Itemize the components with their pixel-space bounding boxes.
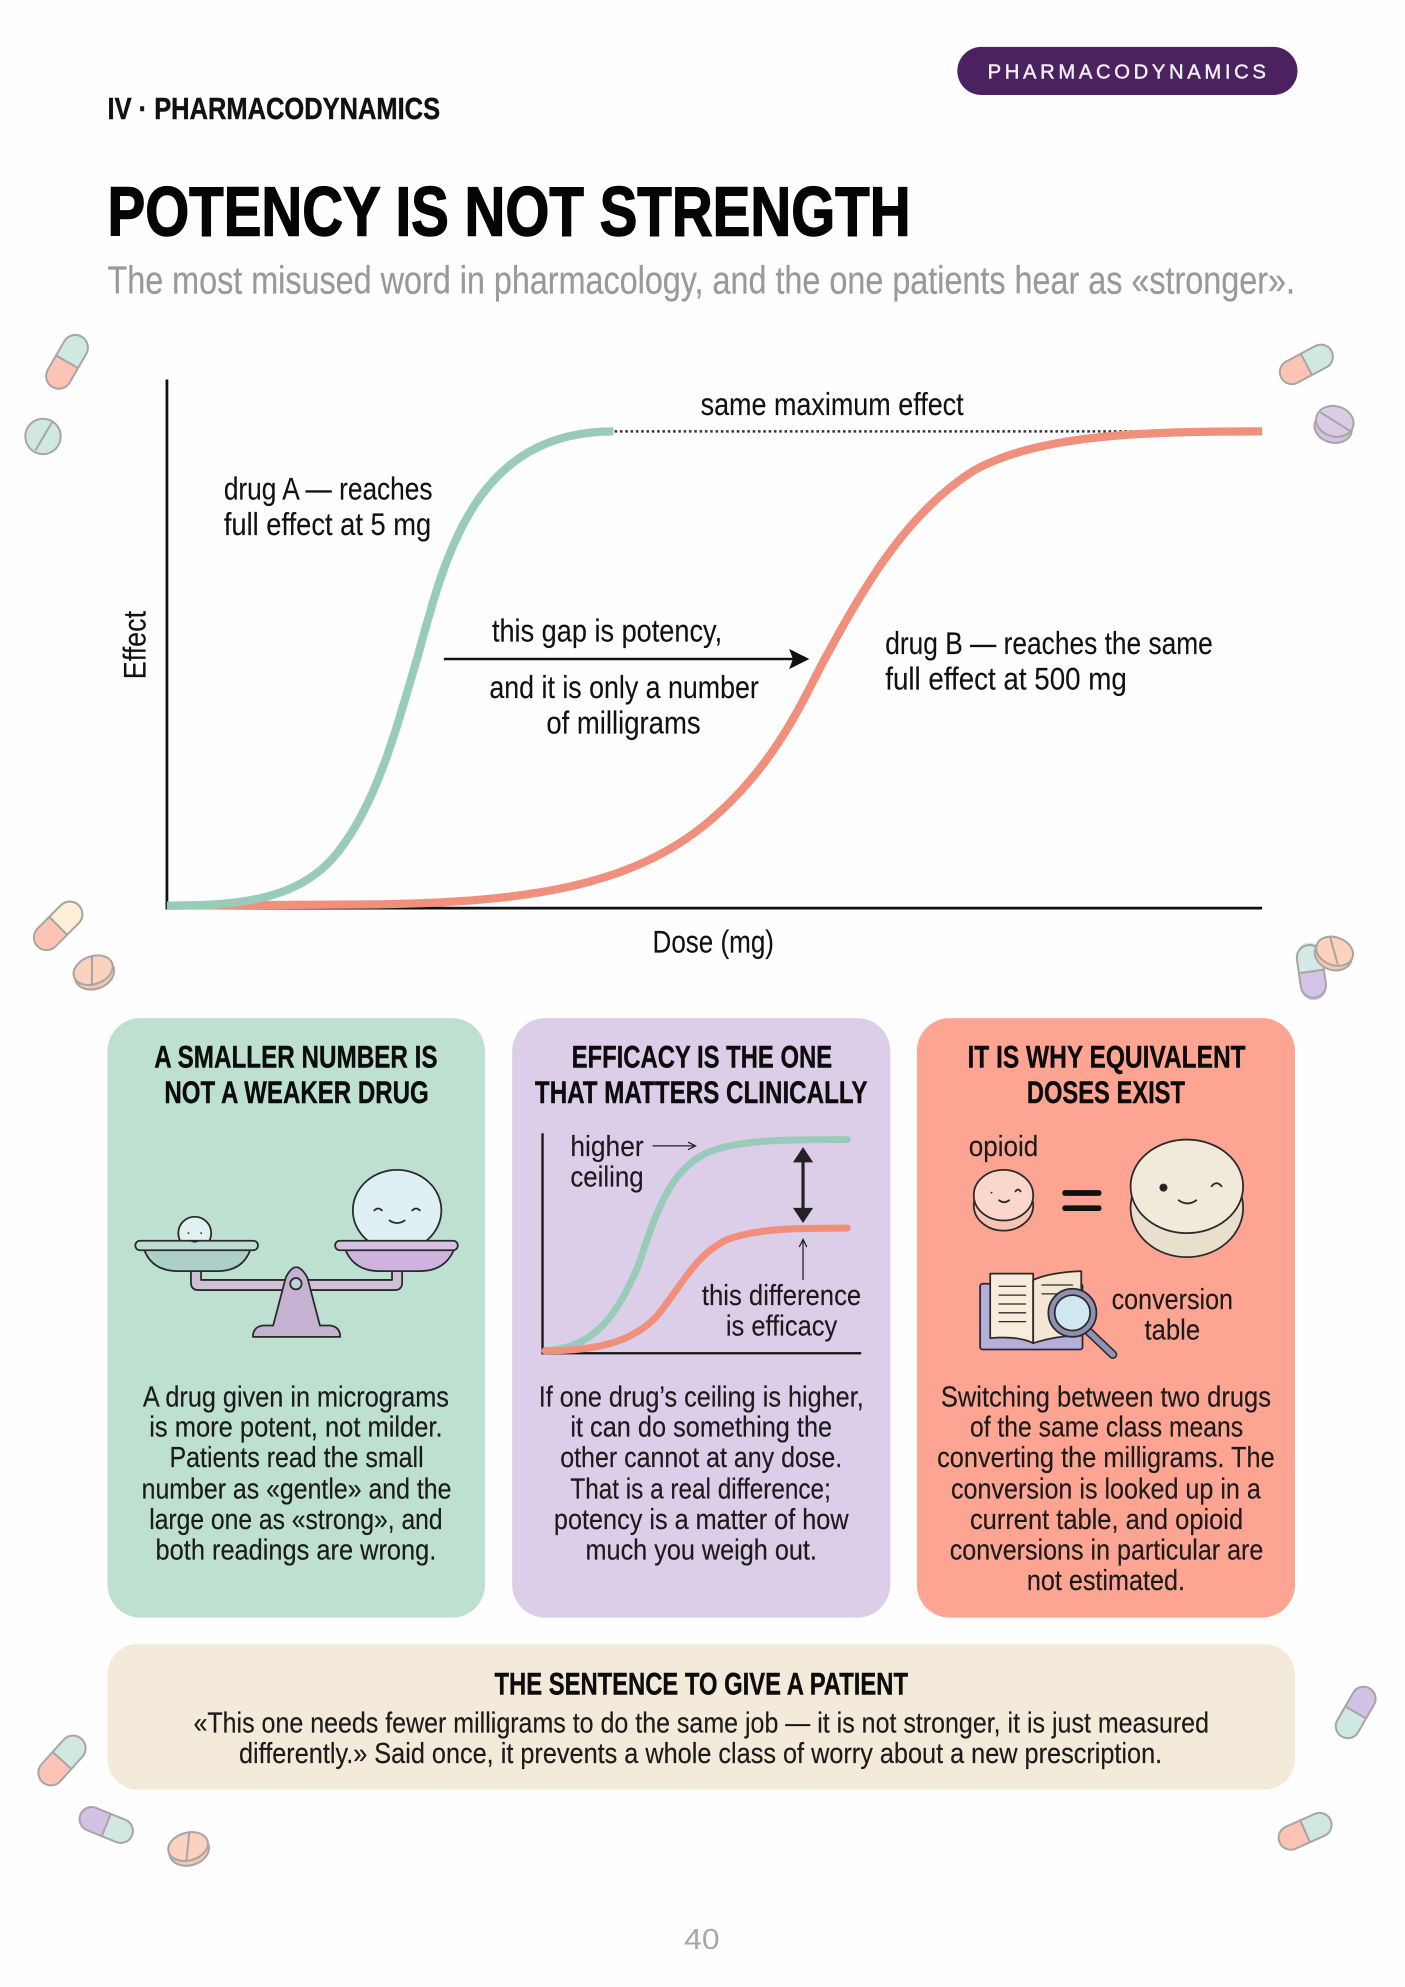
label: potency gap — [489, 612, 759, 741]
panel text: it can do something the — [570, 1412, 832, 1444]
panel heading: THAT MATTERS CLINICALLY — [535, 1074, 868, 1110]
panel heading — [535, 1038, 868, 1110]
panel text: large one as «strong», and — [149, 1504, 443, 1536]
axes — [167, 380, 1262, 908]
panel text — [193, 1708, 1209, 1770]
icon: large tablet — [1131, 1140, 1243, 1257]
label: this difference — [702, 1280, 861, 1343]
icon: capsule bottom right upper — [1331, 1682, 1380, 1743]
panel heading: NOT A WEAKER DRUG — [164, 1074, 429, 1110]
y axis label: Effect — [116, 611, 152, 679]
panel text: much you weigh out. — [586, 1534, 817, 1566]
label: higher ceiling: higher — [570, 1131, 644, 1163]
dotted line: same maximum effect — [615, 430, 1157, 432]
label: opioid: opioid — [969, 1131, 1038, 1163]
icon: equals sign — [1062, 1190, 1101, 1211]
curve: drug B — [167, 431, 1262, 906]
label: drug B: full effect at 500 mg — [885, 660, 1127, 696]
panel heading: EFFICACY IS THE ONE — [572, 1038, 832, 1074]
icon: capsule middle left — [29, 896, 88, 955]
icon: tablet top right — [1311, 402, 1357, 447]
icon: tablet middle right — [1310, 932, 1357, 976]
panel heading — [967, 1038, 1246, 1110]
curve: drug A — [167, 431, 613, 906]
arrow: pointing at lower ceiling — [799, 1239, 807, 1280]
panel heading: IT IS WHY EQUIVALENT — [967, 1038, 1246, 1074]
panel text: number as «gentle» and the — [142, 1474, 451, 1506]
chart: dose-response curves — [116, 380, 1262, 959]
panel text: Switching between two drugs — [941, 1381, 1271, 1413]
arrow: potency gap — [444, 649, 809, 669]
icon: tablet bottom left — [165, 1828, 213, 1870]
panel text: differently.» Said once, it prevents a whole class of worry about a new prescription. — [239, 1738, 1162, 1770]
label: potency gap: and it is only a number — [489, 669, 759, 705]
panel text — [937, 1381, 1275, 1597]
panel text: not estimated. — [1027, 1565, 1185, 1597]
label: conversion table — [1112, 1284, 1233, 1346]
label: this difference: is efficacy — [726, 1311, 838, 1343]
label: higher ceiling: ceiling — [570, 1161, 644, 1193]
arrow: to higher ceiling — [653, 1142, 696, 1150]
panel heading: A SMALLER NUMBER IS — [154, 1038, 438, 1074]
panel heading: THE SENTENCE TO GIVE A PATIENT — [494, 1666, 908, 1702]
label: conversion table: table — [1144, 1314, 1200, 1346]
label: potency gap: of milligrams — [546, 705, 701, 741]
panel text: conversions in particular are — [950, 1534, 1263, 1566]
panel text: «This one needs fewer milligrams to do the same job — it is not stronger, it is just measured — [193, 1708, 1209, 1740]
panel text: conversion is looked up in a — [951, 1474, 1262, 1506]
panel text: is more potent, not milder. — [149, 1412, 443, 1444]
arrow: efficacy difference — [793, 1147, 813, 1223]
panel text: If one drug’s ceiling is higher, — [539, 1381, 864, 1413]
icon: balance scale — [135, 1170, 458, 1337]
label: drug B — [885, 625, 1213, 696]
panel heading — [154, 1038, 438, 1110]
label: drug A: full effect at 5 mg — [224, 506, 431, 542]
icon: capsule bottom right lower — [1274, 1809, 1336, 1854]
panel text: potency is a matter of how — [554, 1504, 849, 1536]
panel text: both readings are wrong. — [156, 1534, 436, 1566]
panel heading: DOSES EXIST — [1027, 1074, 1185, 1110]
panel text: of the same class means — [970, 1412, 1243, 1444]
icon: capsule middle right — [1295, 941, 1328, 1002]
panel text: Patients read the small — [169, 1442, 424, 1474]
label: same maximum effect: same maximum effect — [701, 386, 964, 422]
page number: 40 — [684, 1924, 720, 1956]
icon: capsule top left — [42, 330, 93, 393]
panel text: converting the milligrams. The — [937, 1442, 1275, 1474]
icon: tablet top left — [25, 419, 61, 454]
panel text — [539, 1381, 864, 1566]
label: drug B: drug B — reaches the same — [885, 625, 1213, 661]
label: drug A: drug A — reaches — [224, 471, 433, 507]
panel text: current table, and opioid — [970, 1504, 1243, 1536]
label: potency gap: this gap is potency, — [492, 612, 722, 648]
header tag pill — [957, 47, 1298, 95]
panel text — [142, 1381, 451, 1566]
icon: conversion table book with magnifier — [980, 1271, 1113, 1355]
panel text: That is a real difference; — [570, 1474, 831, 1506]
icon: capsule bottom left — [33, 1730, 91, 1791]
chart: efficacy curves — [543, 1131, 861, 1353]
panel text: A drug given in micrograms — [143, 1381, 449, 1413]
icon: small tablet — [974, 1170, 1033, 1231]
panel: smaller number — [107, 1018, 485, 1618]
label: higher ceiling — [570, 1131, 644, 1193]
panel: equivalent doses — [917, 1018, 1295, 1618]
panel: sentence to give a patient — [107, 1644, 1295, 1790]
section label: IV · PHARMACODYNAMICS — [107, 93, 440, 126]
label: drug A — [224, 471, 433, 542]
label: conversion table: conversion — [1112, 1284, 1233, 1316]
header tag pill: PHARMACODYNAMICS — [988, 62, 1266, 84]
panel text: other cannot at any dose. — [560, 1442, 842, 1474]
icon: capsule bottom left lower — [75, 1803, 137, 1847]
label: this difference: this difference — [702, 1280, 861, 1312]
x axis label: Dose (mg) — [653, 923, 774, 959]
title: POTENCY IS NOT STRENGTH — [107, 172, 911, 250]
icon: tablet middle left — [69, 950, 119, 995]
panel: efficacy — [512, 1018, 890, 1618]
icon: capsule top right — [1276, 340, 1337, 388]
